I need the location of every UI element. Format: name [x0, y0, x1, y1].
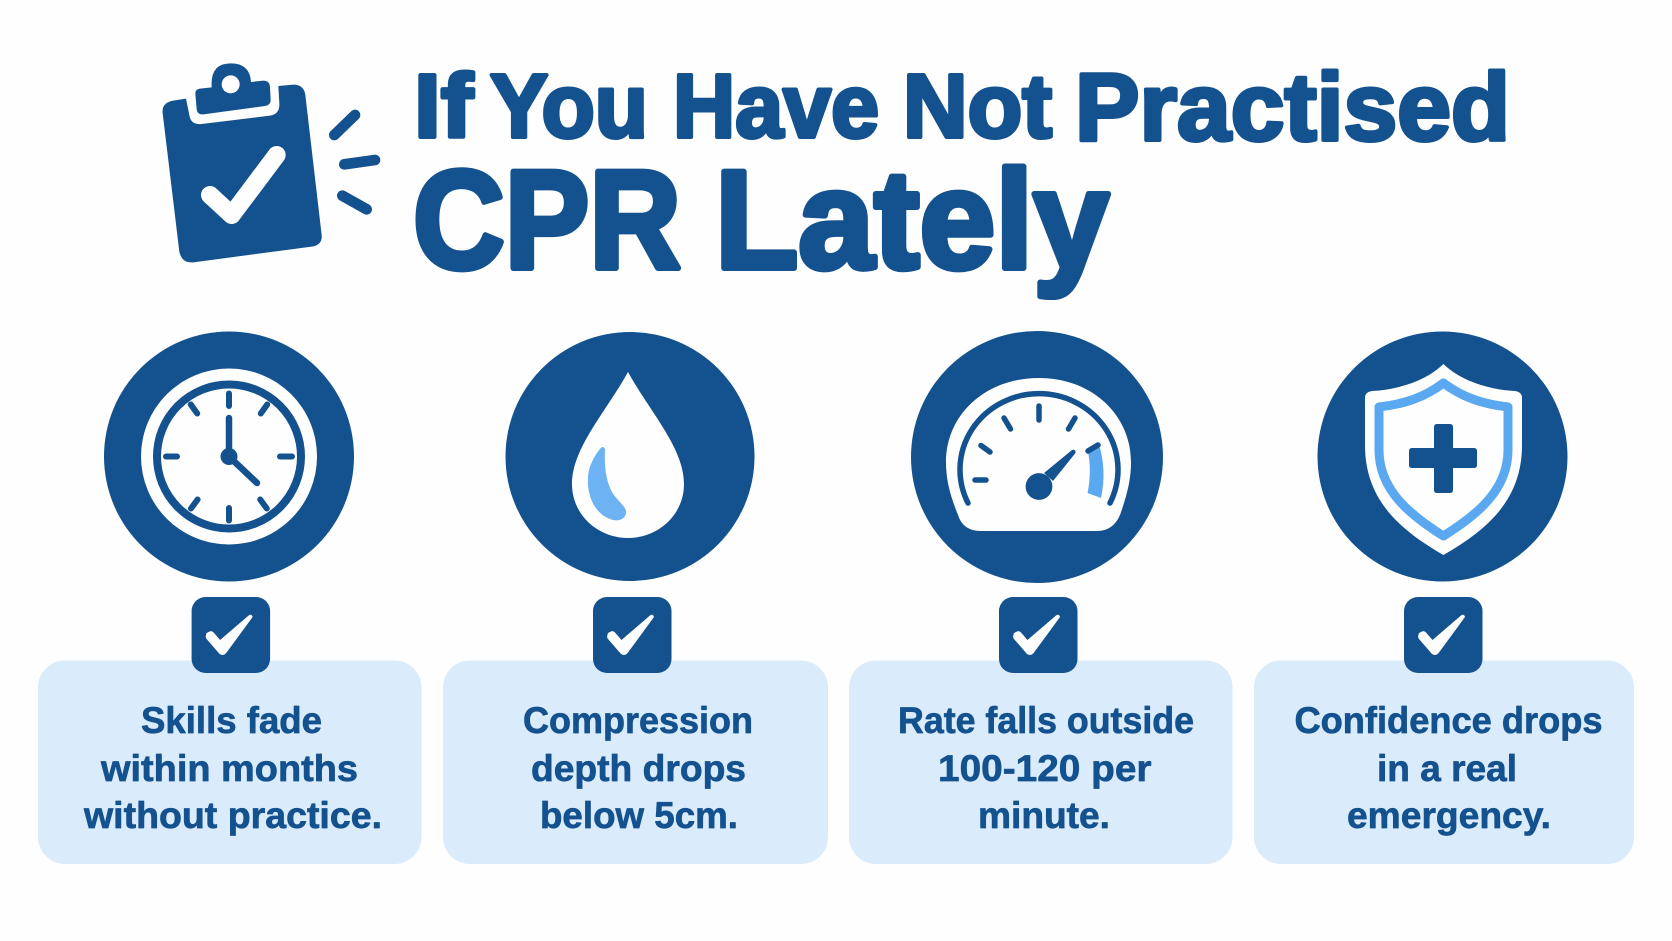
icon: clock — [104, 332, 354, 582]
check badge — [1404, 597, 1482, 673]
text card: 100-120 per — [938, 748, 1152, 789]
text card: within months — [100, 748, 358, 789]
text card: Compression — [523, 700, 753, 741]
check badge — [593, 597, 672, 673]
panel: skills fade — [38, 332, 422, 864]
text card — [38, 659, 422, 864]
text card: in a real — [1377, 748, 1517, 789]
icon: shield with cross — [1318, 332, 1568, 582]
icon: speedometer gauge — [911, 331, 1163, 583]
text card — [849, 659, 1232, 864]
text card: minute. — [978, 795, 1110, 836]
title line 2: CPR — [413, 141, 681, 298]
title line 1: Not — [903, 57, 1052, 157]
text card: Skills fade — [141, 700, 322, 741]
check badge — [192, 597, 270, 673]
title line 2 — [413, 141, 1109, 298]
panel: compression rate — [849, 331, 1232, 864]
text card: Confidence drops — [1294, 700, 1602, 741]
text card: Rate falls outside — [898, 700, 1194, 741]
panel: confidence — [1254, 332, 1634, 864]
title line 1: Have — [673, 57, 879, 157]
title line 1 — [414, 54, 1510, 161]
title line 1: If — [414, 57, 474, 157]
title — [413, 54, 1510, 298]
icon: clipboard with checkmark — [163, 63, 375, 262]
title line 1: You — [490, 57, 648, 157]
panel: compression depth — [443, 332, 828, 864]
icon: water drop — [506, 332, 754, 581]
text card: emergency. — [1347, 795, 1551, 836]
text card: below 5cm. — [540, 795, 738, 836]
text card — [1254, 659, 1634, 864]
check badge — [999, 597, 1078, 673]
text card: without practice. — [83, 795, 382, 836]
text card — [443, 659, 828, 864]
text card: depth drops — [531, 748, 746, 789]
title line 2: Lately — [715, 141, 1109, 298]
title line 1: Practised — [1075, 54, 1510, 161]
